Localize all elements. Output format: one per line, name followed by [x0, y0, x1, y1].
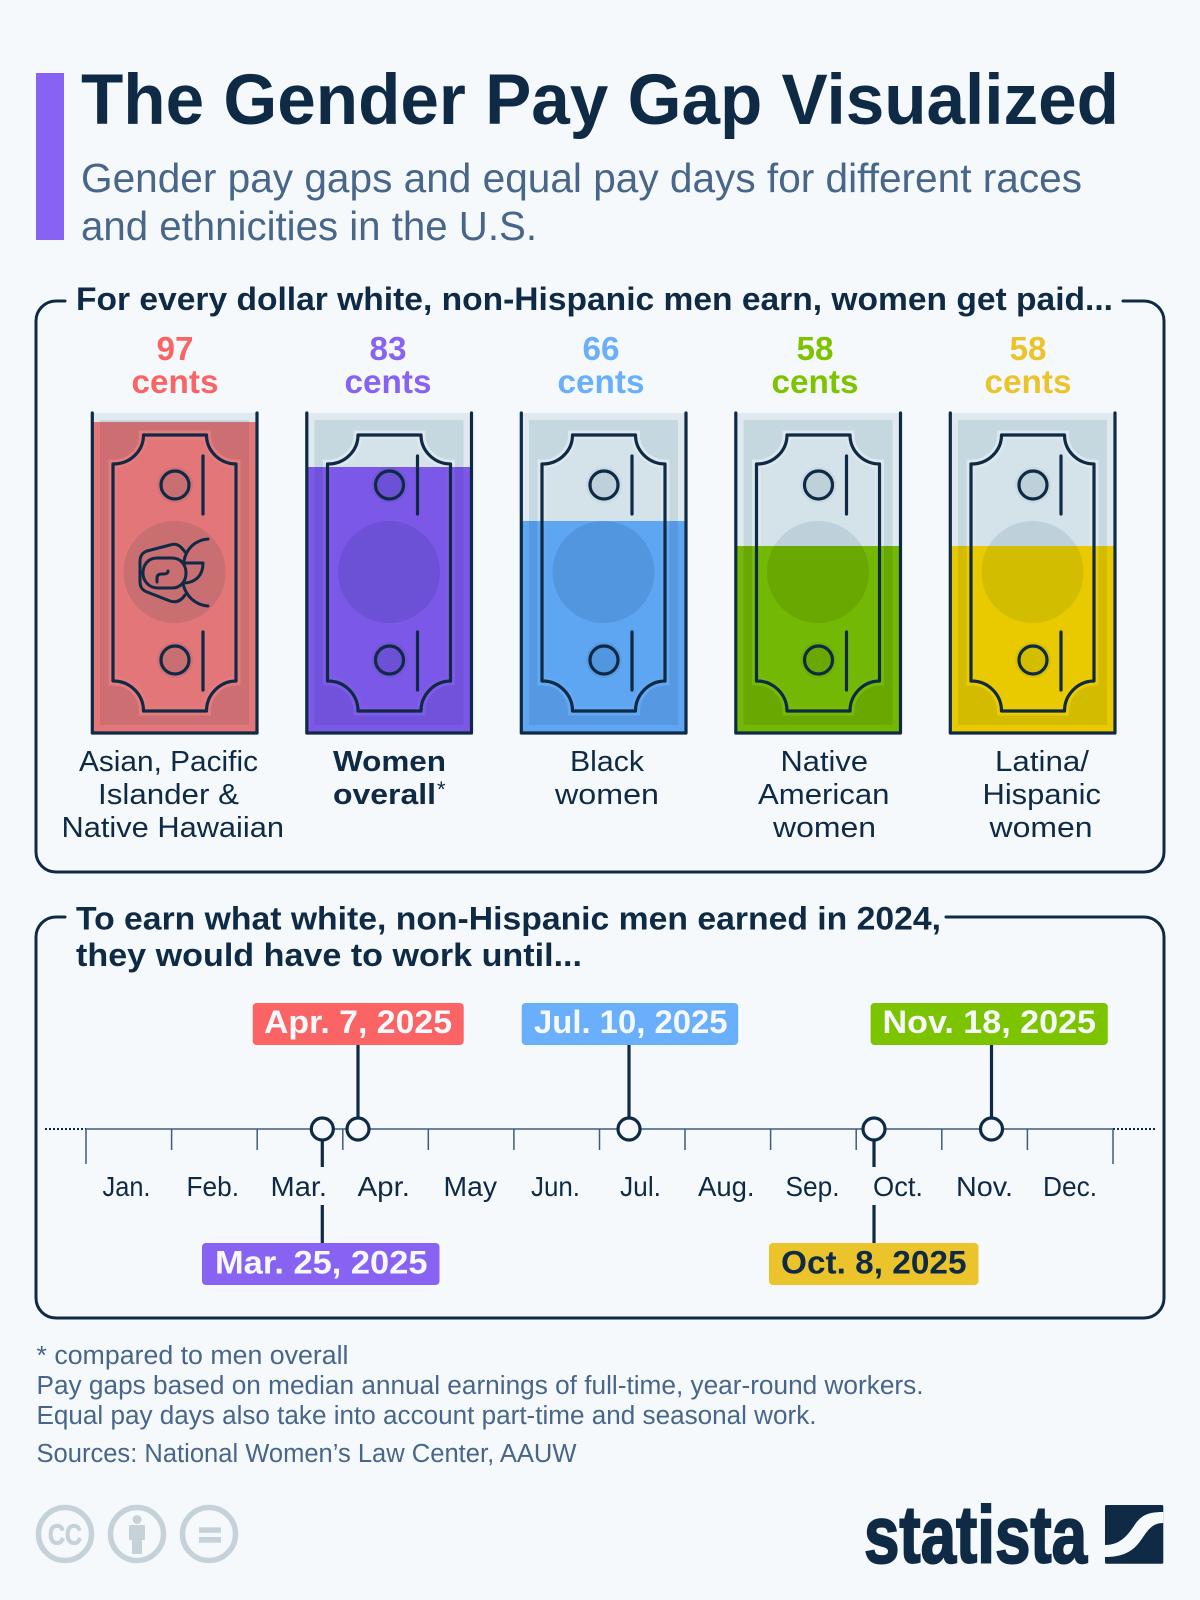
label	[554, 746, 659, 811]
panel heading: To earn what white, non-Hispanic men earned in 2024,	[76, 900, 941, 936]
month labels: Aug.	[698, 1171, 754, 1202]
icon: cc	[38, 1508, 92, 1560]
footnotes: Sources: National Women’s Law Center, AAUW	[36, 1440, 576, 1468]
panel heading	[76, 900, 941, 973]
value: 58 cents: 58	[1010, 330, 1046, 367]
marker: Apr. 7, 2025	[253, 1003, 464, 1140]
accent bar	[36, 73, 64, 240]
value: 58 cents	[772, 330, 858, 400]
label: Native Hawaiian	[62, 812, 284, 844]
icon: creative commons licence	[38, 1508, 236, 1560]
panel border	[36, 301, 1164, 872]
month labels: Nov.	[956, 1171, 1013, 1202]
icon: cc: CC	[48, 1520, 82, 1552]
panel: equal pay day timeline	[36, 900, 1164, 1318]
value: 66 cents: 66	[582, 330, 620, 367]
value: 66 cents	[558, 330, 644, 400]
icon: dollar bill filled to 83 percent	[307, 413, 472, 733]
label: women	[772, 812, 876, 844]
label	[758, 746, 890, 844]
column: Native American women	[736, 330, 900, 844]
timeline axis	[45, 1129, 1156, 1164]
column: Black women	[521, 330, 686, 811]
label: Islander &	[98, 779, 239, 811]
month labels: May	[444, 1171, 497, 1202]
footnotes: Equal pay days also take into account part-time and seasonal work.	[36, 1402, 816, 1430]
icon: dollar bill filled to 66 percent	[521, 413, 686, 733]
label: Latina/	[995, 746, 1089, 778]
month labels	[102, 1171, 1097, 1202]
label	[982, 746, 1101, 844]
logo: statista: statista	[864, 1490, 1088, 1580]
month labels: Mar.	[270, 1171, 327, 1202]
panel heading: they would have to work until...	[76, 937, 582, 973]
marker: Nov. 18, 2025	[871, 1003, 1108, 1140]
label: overall	[333, 779, 436, 811]
panel border	[36, 917, 1164, 1318]
label: women	[988, 812, 1092, 844]
icon: dollar bill filled to 58 percent	[950, 413, 1115, 733]
marker: Mar. 25, 2025: Mar. 25, 2025	[215, 1244, 428, 1280]
column: Latina and Hispanic women	[950, 330, 1115, 844]
value: 83 cents: cents	[344, 363, 432, 400]
month labels: Jun.	[531, 1171, 580, 1202]
icon: attribution	[110, 1508, 164, 1560]
marker: Oct. 8, 2025: Oct. 8, 2025	[781, 1244, 966, 1280]
marker: Apr. 7, 2025: Apr. 7, 2025	[264, 1004, 452, 1040]
footnotes	[36, 1342, 924, 1468]
marker: Nov. 18, 2025: Nov. 18, 2025	[882, 1004, 1096, 1040]
marker: Mar. 25, 2025	[202, 1118, 440, 1285]
label: *	[437, 777, 446, 802]
column: Asian, Pacific Islander and Native Hawaiian women	[62, 330, 284, 844]
value: 66 cents: cents	[558, 363, 644, 400]
marker: Oct. 8, 2025	[769, 1118, 978, 1285]
icon: dollar bill filled to 58 percent	[736, 413, 900, 733]
value: 83 cents: 83	[370, 330, 406, 367]
panel: pay gap in cents	[36, 281, 1164, 872]
month labels: Sep.	[786, 1171, 840, 1202]
label	[333, 746, 446, 811]
label: Native	[780, 746, 868, 778]
title: The Gender Pay Gap Visualized	[81, 61, 1119, 140]
footnotes: * compared to men overall	[36, 1342, 348, 1370]
label: Asian, Pacific	[79, 746, 258, 778]
panel heading: For every dollar white, non-Hispanic men earn, women get paid...	[76, 281, 1113, 317]
label	[62, 746, 284, 844]
month labels: Dec.	[1043, 1171, 1097, 1202]
column: women overall	[307, 330, 472, 811]
month labels: Apr.	[358, 1171, 410, 1202]
label: Hispanic	[982, 779, 1101, 811]
month labels: Oct.	[873, 1171, 923, 1202]
footnotes: Pay gaps based on median annual earnings of full-time, year-round workers.	[36, 1372, 924, 1400]
month labels: Feb.	[186, 1171, 239, 1202]
value: 83 cents	[344, 330, 432, 400]
icon: dollar bill filled to 97 percent	[92, 413, 257, 733]
label: women	[554, 779, 659, 811]
month labels: Jul.	[620, 1171, 661, 1202]
subtitle: and ethnicities in the U.S.	[81, 203, 537, 249]
label: American	[758, 779, 890, 811]
icon: portrait on bill	[140, 539, 208, 606]
subtitle	[81, 155, 1082, 249]
month labels: Jan.	[102, 1171, 150, 1202]
value: 97 cents: 97	[156, 330, 194, 367]
value: 58 cents: cents	[772, 363, 858, 400]
label: Women	[333, 746, 446, 778]
value: 97 cents	[132, 330, 218, 400]
value: 97 cents: cents	[132, 363, 218, 400]
value: 58 cents	[984, 330, 1072, 400]
label: Black	[570, 746, 645, 778]
value: 58 cents: cents	[984, 363, 1072, 400]
marker: Jul. 10, 2025	[522, 1003, 738, 1140]
value: 58 cents: 58	[796, 330, 834, 367]
marker: Jul. 10, 2025: Jul. 10, 2025	[534, 1004, 728, 1040]
icon: statista mark	[1105, 1505, 1163, 1564]
subtitle: Gender pay gaps and equal pay days for different races	[81, 155, 1082, 201]
icon: no derivatives	[182, 1508, 236, 1560]
